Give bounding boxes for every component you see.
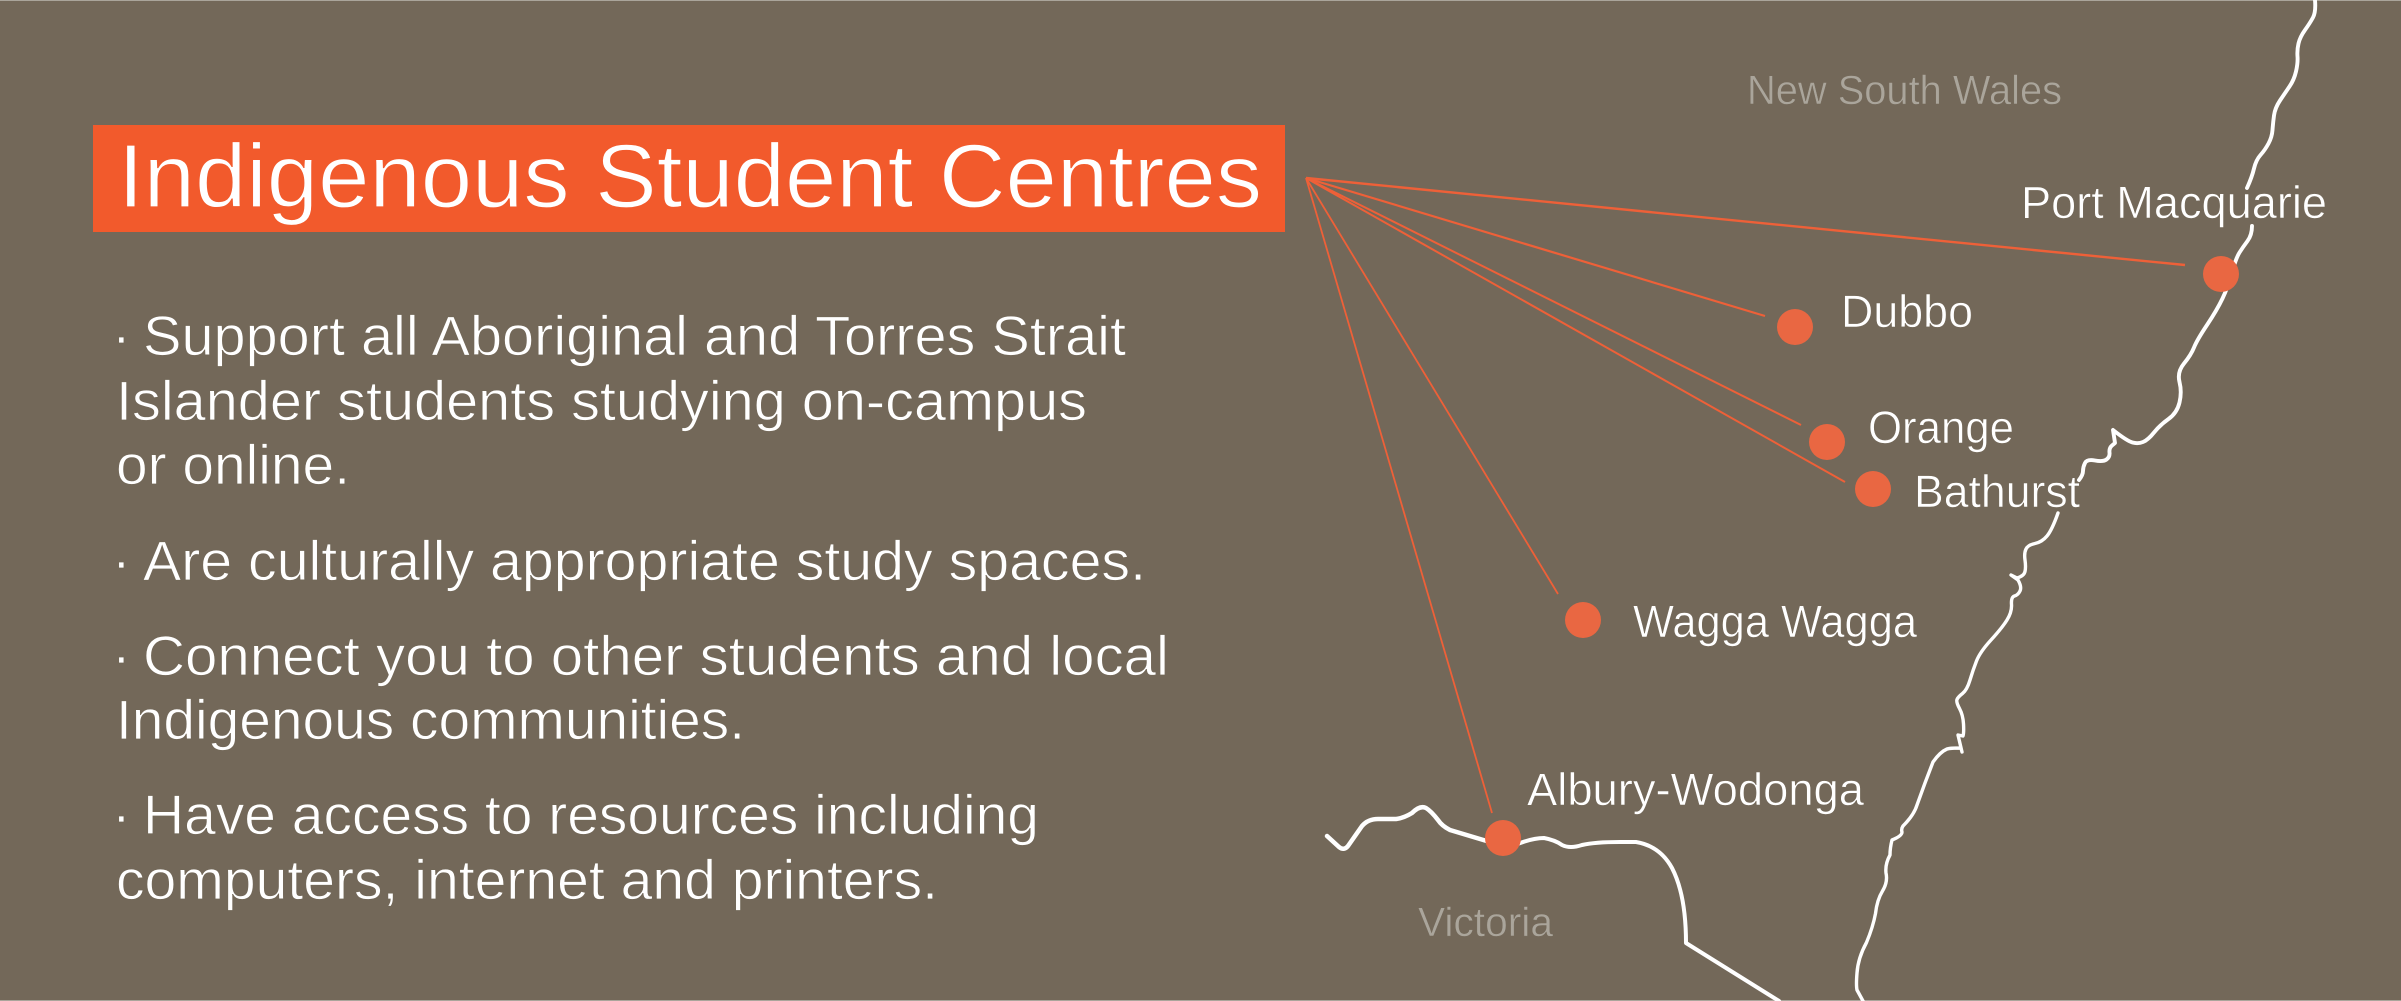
line to Wagga Wagga [1306, 178, 1558, 594]
line to Port Macquarie [1306, 178, 2185, 265]
bullet: connect [112, 624, 1169, 751]
bullet: study spaces: Are culturally appropriate study spaces. [143, 529, 1146, 592]
bullet: resources: Have access to resources including [143, 783, 1039, 846]
coastline north section [2247, 0, 2315, 188]
state label: New South Wales: New South Wales [1747, 67, 2062, 113]
coastline central section [2079, 226, 2252, 480]
title banner: Indigenous Student Centres [118, 127, 1262, 227]
state label: Victoria: Victoria [1418, 899, 1553, 945]
line to Dubbo [1306, 178, 1765, 316]
Victoria border east of Albury [1515, 838, 1779, 1001]
line to Albury-Wodonga [1306, 178, 1492, 813]
centre: Port Macquarie: Port Macquarie [2021, 177, 2327, 228]
coastline south section [1856, 513, 2058, 1001]
bullet: support: · [112, 304, 131, 367]
bullet list [112, 304, 1169, 911]
bullet: resources [112, 783, 1039, 911]
bullet: support: Islander students studying on-campus [116, 369, 1087, 432]
centre: Dubbo: Dubbo [1841, 286, 1973, 337]
centre: Bathurst: Bathurst [1914, 466, 2080, 517]
centre: Orange [1809, 402, 2014, 460]
map: state borders and coastline [1327, 0, 2315, 1001]
line to Orange [1306, 178, 1801, 425]
centre: Dubbo [1777, 286, 1973, 345]
bullet: connect: Connect you to other students and local [143, 624, 1169, 687]
bullet: study spaces: · [112, 529, 131, 592]
centre: Port Macquarie [2021, 177, 2327, 292]
bullet: resources: computers, internet and printers. [116, 848, 938, 911]
Victoria border west of Albury [1327, 807, 1490, 849]
centre: Wagga Wagga: Wagga Wagga [1633, 596, 1918, 647]
line to Bathurst [1306, 178, 1845, 482]
bullet: support [112, 304, 1126, 496]
bullet: support: Support all Aboriginal and Torres Strait [143, 304, 1126, 367]
bullet: support: or online. [116, 433, 350, 496]
centre: Albury-Wodonga: Albury-Wodonga [1527, 764, 1865, 815]
bullet: connect: · [112, 624, 131, 687]
centre: Orange: Orange [1868, 402, 2014, 453]
connector lines from title to centres [1306, 178, 2185, 813]
centre: Albury-Wodonga [1485, 764, 1865, 856]
bullet: resources: · [112, 783, 131, 846]
bullet: connect: Indigenous communities. [116, 688, 745, 751]
